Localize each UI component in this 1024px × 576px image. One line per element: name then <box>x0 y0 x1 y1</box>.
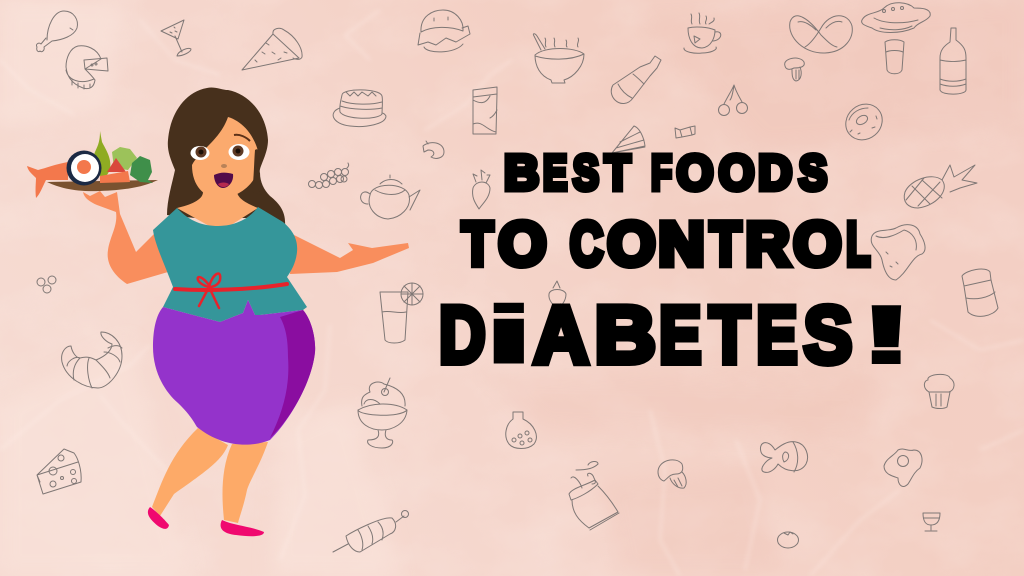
doodle: soup bowl <box>533 34 584 83</box>
doodle: shrimp <box>423 141 444 158</box>
mouth <box>214 173 233 188</box>
title line 3: ! <box>860 290 914 380</box>
shoes <box>148 507 264 536</box>
doodle: cupcake <box>924 374 954 408</box>
doodle: nuts <box>37 276 56 293</box>
doodle: cocktail <box>161 20 191 56</box>
pear <box>93 131 110 180</box>
title line 1: B <box>504 146 539 200</box>
doodle: grapes <box>308 163 349 188</box>
doodle: cheese wheel <box>66 46 108 89</box>
title line 1: E <box>543 146 567 200</box>
doodle: pie <box>862 3 930 33</box>
title line 3: i <box>483 290 535 380</box>
doodle: cheese block <box>37 449 81 494</box>
open arm <box>290 234 409 274</box>
doodle: pretzel <box>790 16 852 53</box>
dark leaves <box>130 156 153 183</box>
legs <box>152 428 268 523</box>
red belt with bow <box>175 274 287 308</box>
raised arm holding plate <box>83 191 168 284</box>
doodle: candy <box>675 126 695 138</box>
title line 1: O <box>719 146 754 200</box>
doodle: chips bag <box>569 461 619 530</box>
plate <box>47 180 158 191</box>
doodle: glass <box>885 40 904 74</box>
doodle: teapot <box>361 175 420 219</box>
dark skirt shade <box>270 310 315 438</box>
title line 1: S <box>573 146 599 200</box>
neck and chest <box>177 192 258 232</box>
title line 3: D <box>439 290 486 380</box>
title line 3: E <box>756 290 797 380</box>
food plate <box>27 131 158 198</box>
doodle: ice cream sundae <box>358 378 407 448</box>
title line 3: E <box>659 290 701 380</box>
carrot <box>100 171 130 183</box>
doodle: juice glass <box>380 283 423 343</box>
doodle: radish <box>473 170 490 209</box>
doodle: chicken leg <box>36 11 77 52</box>
title line 2: C <box>570 210 603 278</box>
doodle: bottle <box>611 56 661 104</box>
title line 3: T <box>709 290 750 380</box>
title <box>439 146 914 380</box>
lettuce <box>112 147 137 170</box>
doodle: pancakes <box>333 90 386 127</box>
hair <box>167 87 285 226</box>
doodle: milk carton <box>473 87 497 134</box>
doodle: tall bottle <box>940 28 966 94</box>
face <box>192 117 260 198</box>
title line 1: D <box>758 146 792 200</box>
tomato <box>107 158 126 172</box>
teal top <box>153 207 307 322</box>
hair strand over face <box>252 149 262 195</box>
doodle: burger <box>418 10 470 52</box>
doodle: fried egg <box>884 449 922 486</box>
doodle: tomato <box>778 532 798 548</box>
title line 2: T <box>710 210 741 278</box>
title line 2: R <box>746 210 790 278</box>
title line 2: O <box>608 210 655 278</box>
fish <box>27 162 68 198</box>
title line 2: O <box>498 210 546 278</box>
eyes <box>190 135 250 160</box>
title line 2: O <box>794 210 841 278</box>
title line 1: F <box>651 146 672 200</box>
doodle: kebab skewer <box>333 510 408 552</box>
woman character holding a food plate <box>27 87 409 536</box>
title line 1: S <box>799 146 827 200</box>
doodle: pineapple <box>904 165 977 208</box>
doodle: round jar <box>506 412 536 448</box>
title line 3: A <box>534 290 589 380</box>
title line 2: L <box>846 210 870 278</box>
doodle: pizza slice <box>242 28 302 70</box>
doodle: cake slice <box>612 126 645 153</box>
doodle: croissant <box>62 332 122 388</box>
doodle: mushroom small <box>658 460 686 488</box>
title line 1: O <box>677 146 713 200</box>
title line 2: T <box>462 210 493 278</box>
title line 1: T <box>605 146 630 200</box>
doodle: jar <box>962 269 998 316</box>
doodle: wine glass <box>923 513 940 531</box>
doodle: coffee cup <box>684 13 721 53</box>
title line 2: N <box>658 210 704 278</box>
doodle: donut <box>839 97 889 147</box>
nose <box>221 164 227 168</box>
doodle: fish <box>760 442 808 472</box>
doodle: mushroom <box>785 58 804 81</box>
doodle: strawberry <box>549 281 566 308</box>
doodle: cherries <box>718 85 748 116</box>
purple skirt <box>153 300 315 445</box>
doodle: toast <box>871 225 925 280</box>
sushi roll <box>66 150 102 186</box>
title line 3: B <box>594 290 656 380</box>
title line 3: S <box>804 290 852 380</box>
